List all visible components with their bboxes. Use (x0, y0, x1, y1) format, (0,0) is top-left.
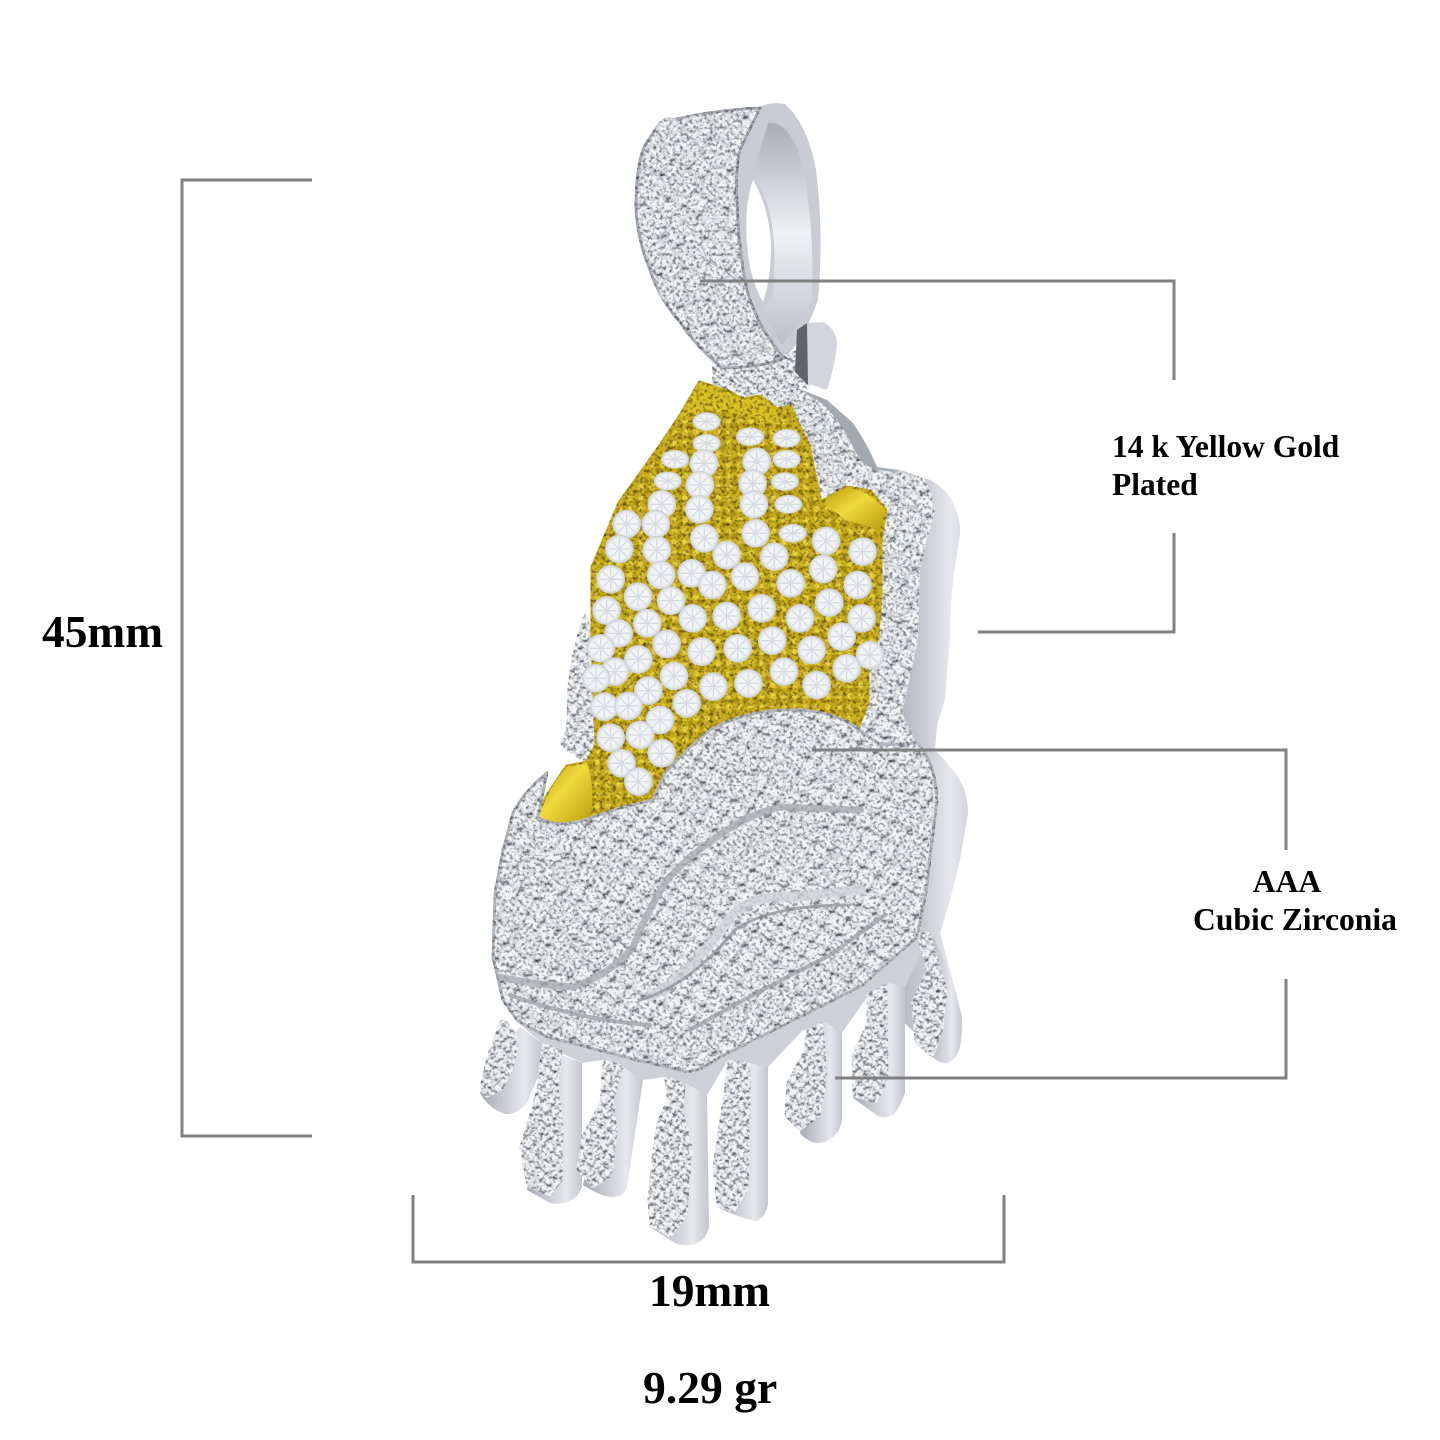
callout leader: yellow gold, lower (978, 533, 1174, 632)
bail tab (795, 322, 837, 390)
callout label: cubic zirconia: AAA (1253, 864, 1321, 899)
metal drips (480, 937, 962, 1245)
bail: pavé stones (636, 108, 784, 368)
callout leader: yellow gold, upper (700, 281, 1174, 380)
weight label: 9.29 gr (643, 1362, 777, 1413)
stones on gold hand (582, 412, 884, 796)
drip stones (482, 934, 945, 1235)
pendant: praying hands (480, 103, 968, 1245)
height dimension bracket (182, 180, 312, 1136)
width label: 19mm (649, 1266, 770, 1316)
right thumb pavé strip (760, 377, 935, 745)
callout leader: cubic zirconia, lower (835, 979, 1286, 1078)
gold thumb tip (823, 488, 885, 530)
connector between bail and hand (712, 345, 810, 400)
callout label: cubic zirconia: Cubic Zirconia (1193, 902, 1397, 937)
callout leader: cubic zirconia, upper (812, 750, 1286, 850)
bail: metal ring (735, 103, 821, 358)
metal band under the cuff (515, 930, 930, 1095)
callout label: yellow gold plating: Plated (1112, 467, 1198, 502)
lower cuff pavé (493, 710, 937, 1072)
gold wrist highlight (538, 763, 592, 825)
width dimension bracket (413, 1195, 1004, 1262)
gold praying hand (538, 383, 885, 825)
cuff large rim stones (499, 726, 924, 1061)
callout label: yellow gold plating: 14 k Yellow Gold (1112, 429, 1340, 464)
gold hand body (538, 383, 885, 825)
silver backing of the hand and right side (780, 385, 968, 1063)
pavé strip behind the left palm (560, 612, 600, 775)
cuff fold lines (500, 807, 885, 1030)
height label: 45mm (42, 607, 163, 657)
